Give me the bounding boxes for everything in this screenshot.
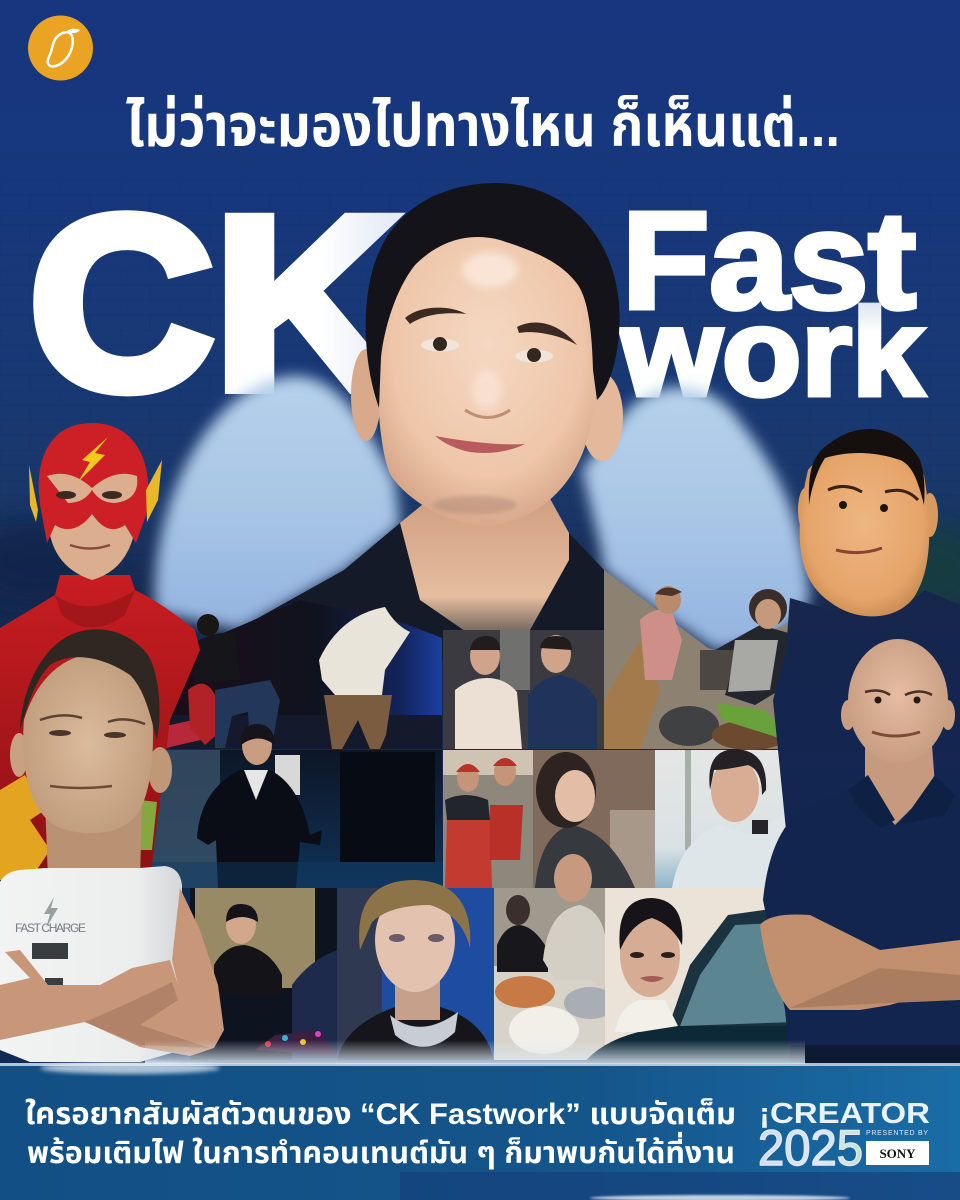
lightning chest emblem (0, 775, 50, 880)
forehead highlight (462, 252, 518, 288)
polo shirt (763, 790, 960, 1060)
logo: mango badge (28, 16, 93, 80)
hair (20, 629, 160, 740)
photo: man looking at phone (655, 749, 800, 888)
main portrait: CK (235, 183, 640, 660)
photo: man with vintage car (582, 888, 800, 1065)
head (800, 448, 929, 616)
heading: Fast: Fast (622, 184, 916, 338)
ears (10, 733, 28, 777)
logo: iCreator 2025 presented by Sony: 2025 (758, 1120, 863, 1176)
neck (45, 800, 142, 880)
logo: iCreator 2025 presented by Sony: PRESENTED BY (866, 1130, 928, 1137)
helmet (39, 423, 148, 543)
face (378, 224, 597, 526)
logo: iCreator 2025 presented by Sony: SONY (879, 1146, 916, 1161)
face (48, 510, 137, 580)
heading: CK: CK (29, 166, 399, 441)
photo collage row 3 (190, 854, 800, 1065)
photo: woman (533, 750, 655, 888)
bottom light fade (145, 1040, 805, 1064)
collar (55, 590, 135, 628)
features (40, 715, 145, 724)
bottom caption: ใครอยากสัมผัสตัวตนของ “CK Fastwork” แบบจัดเต็ม (25, 1097, 736, 1131)
photo collage row 1 (166, 570, 800, 750)
neck (865, 745, 935, 825)
features (828, 486, 918, 500)
photo collage row 2 (143, 724, 800, 888)
bottom caption: พร้อมเติมไฟ ในการทำคอนเทนต์มัน ๆ ก็มาพบกันได้ที่งาน (27, 1131, 735, 1170)
arms (0, 888, 224, 1056)
hair (366, 183, 620, 408)
shirt (235, 523, 640, 660)
nose (465, 410, 510, 418)
photo: two men indoors (443, 630, 604, 749)
ears (841, 700, 855, 730)
USB ports (32, 943, 68, 959)
character: Flash (0, 423, 200, 880)
heading: work: work (620, 284, 925, 422)
bottom caption (25, 1097, 736, 1170)
bolt (78, 437, 108, 482)
ears (351, 349, 381, 441)
ears (798, 488, 812, 532)
character: fast-charge head (0, 629, 224, 1062)
polo shirt (773, 590, 960, 870)
charger body (0, 866, 182, 1062)
hair (809, 429, 925, 505)
photo: food table (494, 854, 616, 1060)
jeans (790, 1045, 960, 1065)
face (23, 654, 153, 833)
glow behind portrait (155, 376, 810, 650)
head (848, 639, 948, 763)
title: ไม่ว่าจะมองไปทางไหน ก็เห็นแต่... (126, 92, 840, 159)
features (865, 691, 932, 695)
bottom band (0, 1062, 960, 1200)
label FAST CHARGE: FAST CHARGE (15, 921, 86, 935)
eyes (421, 338, 459, 352)
arms (760, 914, 960, 1010)
eyebrows (405, 308, 466, 324)
photo: red aprons (443, 750, 533, 888)
mouth (435, 436, 525, 453)
photo: portrait with blond hair (337, 880, 494, 1060)
logo: iCreator 2025 presented by Sony (758, 1098, 930, 1176)
character: bald man with crossed arms (760, 639, 960, 1065)
photo: man in black suit (143, 724, 445, 888)
photo: cooking (604, 570, 800, 750)
collar (848, 775, 895, 828)
photo: stage chairs (166, 600, 442, 749)
neck (400, 495, 569, 640)
photo: man seated in curtains (190, 888, 337, 1060)
character: fat man (773, 429, 960, 870)
gold ears (29, 465, 38, 522)
bolt mark (44, 897, 58, 928)
stubble (433, 496, 517, 514)
green strip (140, 800, 157, 850)
body suit (0, 575, 200, 880)
logo: iCreator 2025 presented by Sony: ¡CREATOR (759, 1098, 930, 1130)
